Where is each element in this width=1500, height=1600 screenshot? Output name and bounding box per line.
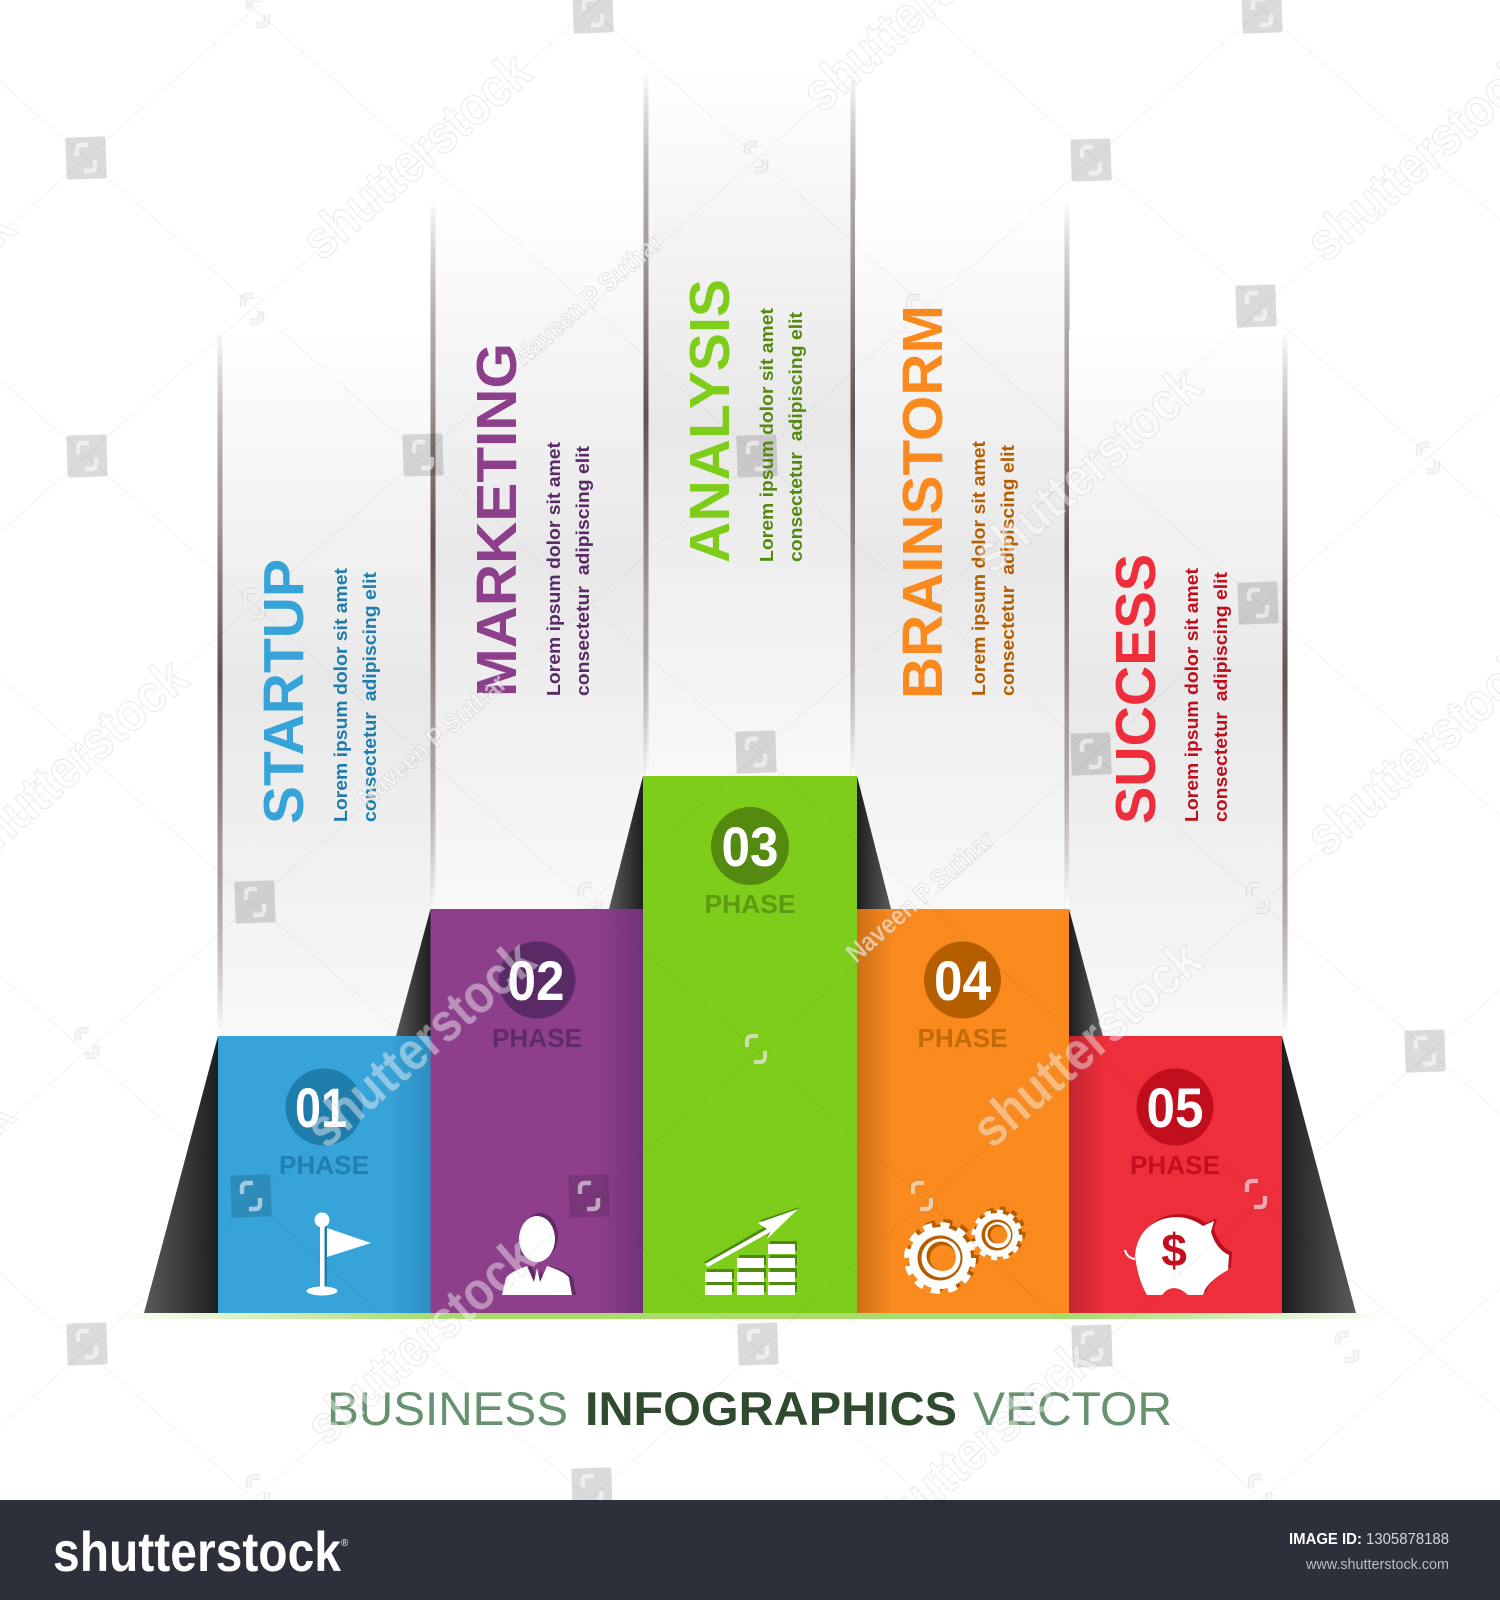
brainstorm description — [969, 441, 1018, 696]
icon: piggy bank — [1125, 1214, 1232, 1295]
stock watermarks overlay: Naveen P Suthar — [352, 668, 513, 813]
number badge 03 — [711, 807, 789, 885]
number badge 05: 05 — [1146, 1076, 1204, 1139]
startup description — [331, 568, 380, 822]
icon: businessperson — [502, 1213, 576, 1295]
side wedge: far left — [144, 1036, 218, 1313]
phase block 02: marketing — [430, 909, 643, 1313]
title: VECTOR — [973, 1382, 1172, 1435]
footer bar — [0, 1500, 1500, 1600]
label: analysis: ANALYSIS — [678, 279, 742, 563]
success description — [1182, 568, 1231, 822]
side wedge: marketing left — [396, 909, 430, 1036]
number badge 01 — [286, 1068, 362, 1146]
success description: Lorem ipsum dolor sit amet — [1182, 568, 1202, 822]
phase block 05: success — [1069, 1036, 1282, 1313]
icon: piggy bank: $ — [1161, 1224, 1187, 1276]
phase block 01: startup — [218, 1036, 430, 1313]
background strip: analysis — [644, 70, 856, 780]
background strip: brainstorm — [855, 200, 1070, 912]
label: marketing — [465, 343, 593, 697]
side wedge: brainstorm right — [1069, 909, 1103, 1036]
footer logo: shutterstock — [53, 1520, 342, 1583]
title: INFOGRAPHICS — [585, 1382, 957, 1435]
number badge 02: 02 — [508, 949, 564, 1012]
stock watermarks overlay: shutterstock — [961, 354, 1213, 585]
label: analysis — [678, 279, 806, 563]
stock watermarks overlay: shutterstock — [854, 1328, 1106, 1559]
brainstorm description: consectetur adipiscing elit — [998, 445, 1018, 696]
ground glow line — [110, 1313, 1395, 1319]
label: startup: STARTUP — [252, 559, 316, 824]
background strip: success — [1069, 330, 1288, 1040]
number badge 04 — [924, 942, 1001, 1018]
logo registered mark: ® — [341, 1538, 349, 1549]
side wedge: far right — [1282, 1036, 1356, 1313]
phase label 05: PHASE — [1130, 1150, 1220, 1180]
icon: growth chart — [704, 1207, 800, 1295]
label: brainstorm — [891, 305, 1018, 699]
analysis description — [757, 308, 806, 562]
marketing description: Lorem ipsum dolor sit amet — [544, 442, 564, 696]
number badge 03: 03 — [722, 815, 778, 878]
brainstorm description: Lorem ipsum dolor sit amet — [969, 441, 989, 696]
title — [327, 1382, 1172, 1435]
stock watermarks overlay: shutterstock — [291, 40, 543, 271]
phase block 03: analysis — [643, 776, 857, 1313]
side wedge: analysis right — [857, 776, 891, 909]
phase label 01: PHASE — [279, 1150, 369, 1180]
phase label 02: PHASE — [492, 1023, 582, 1053]
side wedge: analysis left — [609, 776, 643, 909]
background strip: marketing — [430, 200, 646, 912]
stock watermarks overlay: shutterstock — [295, 1225, 547, 1456]
background strip: startup — [218, 330, 433, 1040]
stock watermarks overlay: Naveen P Suthar — [508, 227, 669, 372]
number badge 02 — [498, 942, 576, 1018]
stock watermarks overlay: shutterstock — [961, 928, 1213, 1159]
image id: IMAGE ID: 1305878188 — [1289, 1531, 1449, 1548]
label: marketing: MARKETING — [465, 343, 529, 697]
startup description: consectetur adipiscing elit — [360, 572, 380, 822]
analysis description: consectetur adipiscing elit — [786, 312, 806, 562]
icon: gears — [907, 1209, 1023, 1291]
phase label 03: PHASE — [704, 889, 796, 919]
phase block 04: brainstorm — [857, 909, 1069, 1313]
label: brainstorm: BRAINSTORM — [891, 305, 955, 699]
number badge 01: 01 — [295, 1076, 347, 1139]
stock watermarks overlay: shutterstock — [295, 928, 547, 1159]
icon: flag — [306, 1212, 371, 1296]
number badge 04: 04 — [934, 949, 991, 1012]
analysis description: Lorem ipsum dolor sit amet — [757, 308, 777, 562]
number badge 05 — [1136, 1068, 1214, 1146]
footer url: www.shutterstock.com — [1305, 1556, 1449, 1573]
startup description: Lorem ipsum dolor sit amet — [331, 568, 351, 822]
label: startup — [252, 559, 380, 824]
phase label 04: PHASE — [918, 1023, 1008, 1053]
marketing description: consectetur adipiscing elit — [573, 446, 593, 696]
title: BUSINESS — [327, 1382, 568, 1435]
marketing description — [544, 442, 593, 696]
label: success: SUCCESS — [1104, 554, 1168, 824]
stock watermarks overlay: Naveen P Suthar — [840, 824, 1001, 969]
label: success — [1104, 554, 1231, 824]
success description: consectetur adipiscing elit — [1211, 572, 1231, 822]
